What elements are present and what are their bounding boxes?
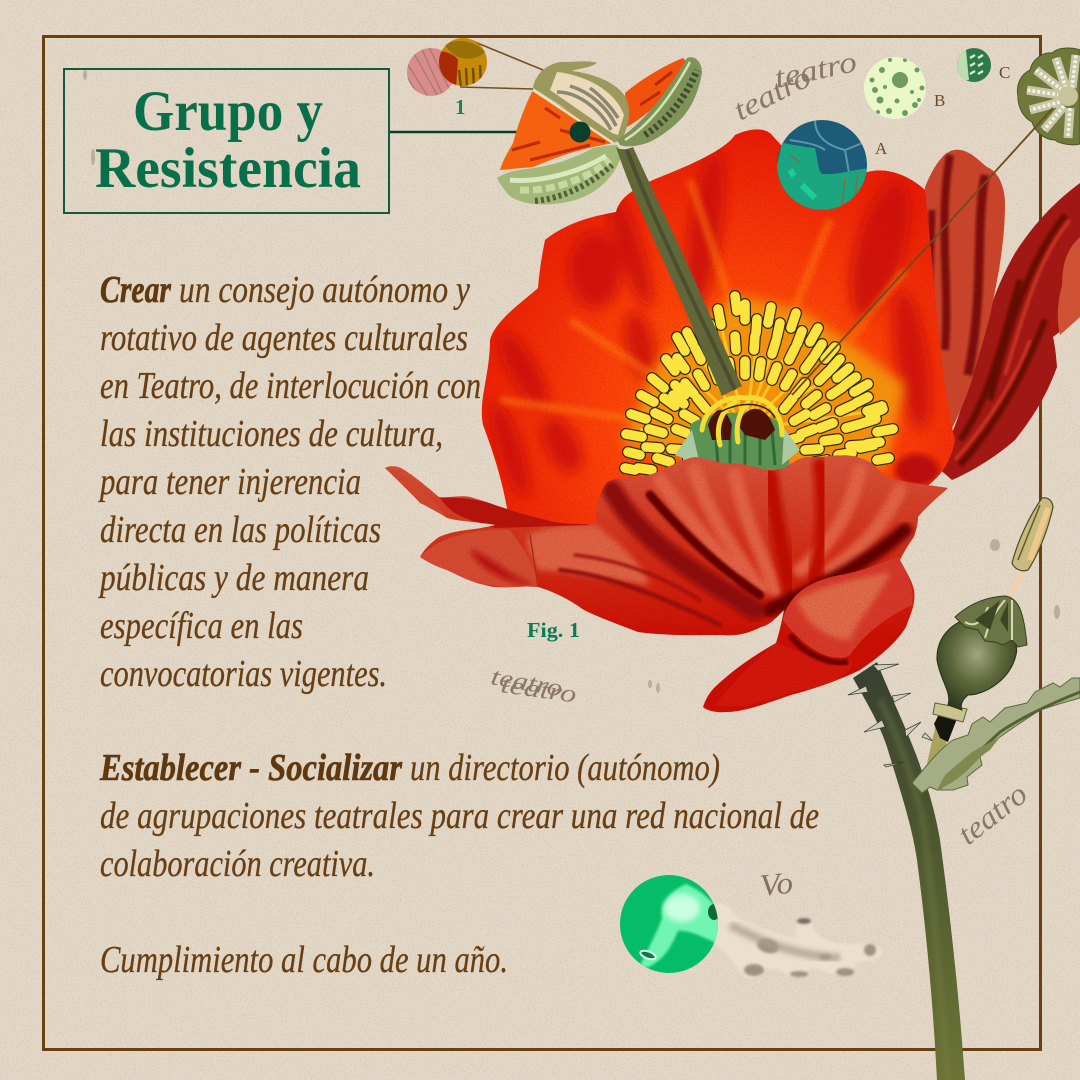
leaf <box>912 678 1080 793</box>
stamens and pistil <box>622 295 905 470</box>
magnifier 1: pink circle <box>404 45 455 100</box>
seed capsule with stamen <box>922 498 1053 790</box>
script word: teatro right: teatro <box>951 776 1034 852</box>
script word: teatro top 2: teatro <box>728 61 816 127</box>
main stem with thorns <box>848 662 965 1080</box>
script word: teatro top 1: teatro <box>772 45 860 95</box>
bud callout dot <box>570 122 590 142</box>
salmon rib highlights <box>660 470 900 590</box>
script word: teatro bottom 2: teatro <box>499 671 578 709</box>
paragraph 1: las instituciones de cultura, <box>100 413 443 455</box>
paragraph 2 <box>99 747 819 885</box>
title box: Grupo y <box>133 80 323 143</box>
pistil <box>675 397 800 470</box>
paragraph 1 <box>98 269 481 695</box>
label B: B <box>934 91 945 110</box>
script word: teatro bottom 1: teatro <box>489 663 565 702</box>
bud right sepal <box>617 57 702 146</box>
magnifier 1: orange circle <box>438 38 487 88</box>
connector: title to bud <box>389 131 580 133</box>
callout lines from bud to magnified circles <box>460 40 543 89</box>
paragraph 2: un directorio (autónomo) <box>410 747 720 789</box>
title box <box>64 69 389 213</box>
main back petals <box>470 120 960 540</box>
title box: Resistencia <box>95 137 361 200</box>
callout line from rosette to flower center <box>792 108 1053 395</box>
paragraph 1: convocatorias vigentes. <box>100 653 387 695</box>
paragraph 1: directa en las políticas <box>100 509 381 551</box>
magnifier A <box>776 120 870 215</box>
magnifier C <box>957 48 991 82</box>
paragraph 2: Establecer - Socializar <box>99 747 403 789</box>
left salmon lobes <box>527 525 650 585</box>
bud stalk <box>616 147 742 396</box>
paragraph 1: para tener injerencia <box>98 461 361 503</box>
paragraph 1: públicas y de manera <box>98 557 369 599</box>
green lens <box>620 875 722 973</box>
label A: A <box>875 139 888 158</box>
figure label: Fig. 1 <box>527 618 580 642</box>
lower fold lobe <box>783 557 913 658</box>
paragraph 1: un consejo autónomo y <box>179 269 470 311</box>
label 1: 1 <box>455 95 466 119</box>
label C: C <box>999 63 1010 82</box>
petal blob near front fold <box>895 454 939 486</box>
paragraph 2: colaboración creativa. <box>100 843 375 885</box>
front petal <box>385 455 955 715</box>
thorns <box>848 664 933 767</box>
top poppy bud <box>497 57 742 396</box>
bud lower sepal <box>497 145 621 204</box>
rosette seed cap <box>1018 48 1080 145</box>
paragraph 2: de agrupaciones teatrales para crear una red nacional de <box>100 795 819 837</box>
twisted right petal <box>905 150 1005 460</box>
paragraph 3: Cumplimiento al cabo de un año. <box>100 939 508 981</box>
paragraph 1: en Teatro, de interlocución con <box>100 365 481 407</box>
dark folds <box>560 465 905 625</box>
bud seed dome <box>533 61 629 143</box>
coral illustration with green lens <box>620 875 882 978</box>
bud left orange petal <box>500 90 613 170</box>
paragraph 1: específica en las <box>100 605 303 647</box>
far right petal <box>937 183 1080 480</box>
magnifier B <box>864 57 926 119</box>
script word: Vo: Vo <box>758 865 795 903</box>
bud right orange petal <box>625 58 687 127</box>
paragraph 1: Crear <box>100 269 172 311</box>
paragraph 1: rotativo de agentes culturales <box>100 317 468 359</box>
